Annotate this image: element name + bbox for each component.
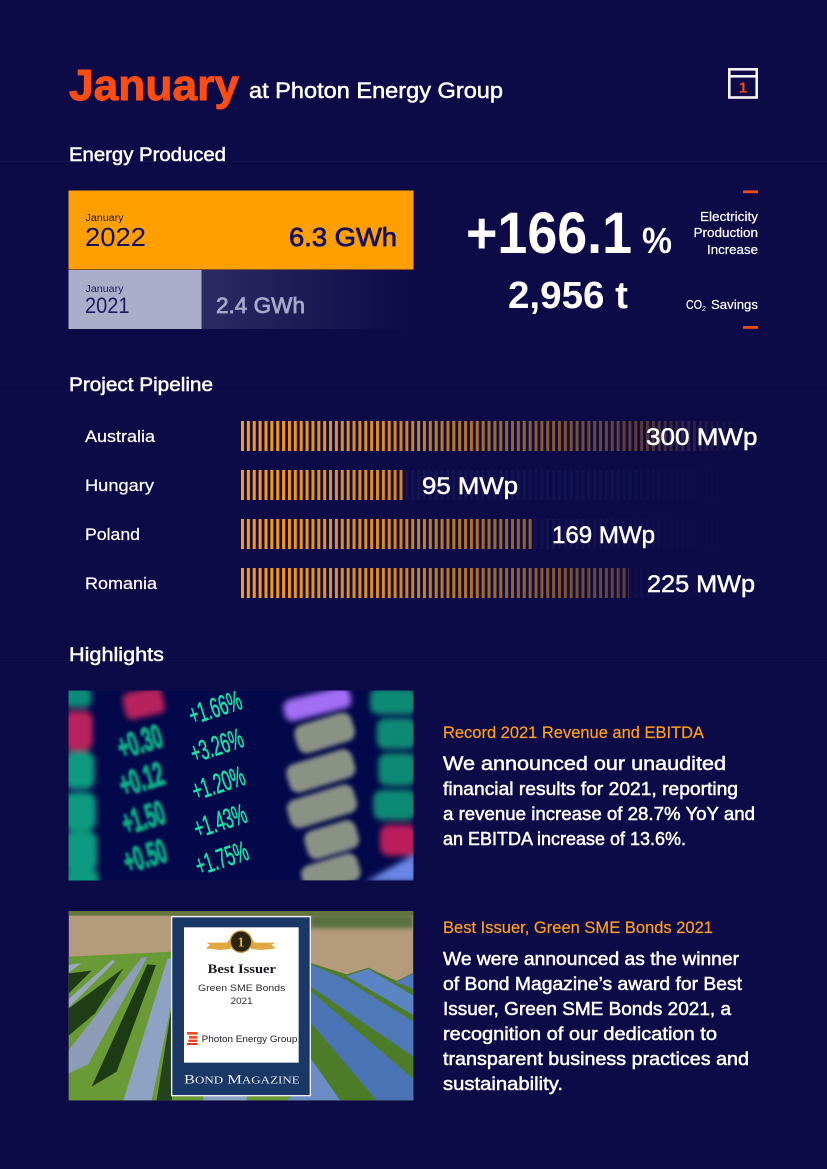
highlight text: revenue: financial results for 2021, reporting: [443, 778, 738, 799]
chart: project pipeline bars: [85, 421, 758, 598]
stat: CO2 savings: [508, 275, 758, 329]
bar: January 2021: [68, 270, 414, 329]
highlight text: revenue: Record 2021 Revenue and EBITDA: [443, 724, 704, 742]
bar: January 2022: 6.3 GWh: [289, 222, 397, 252]
stat: production increase: +166.1: [466, 201, 632, 266]
bar: January 2021: January: [86, 284, 124, 295]
photo: stock market board: +0.50: [119, 833, 171, 881]
photo: stock market board: +1.43%: [190, 798, 251, 844]
highlight text: best issuer: Issuer, Green SME Bonds 2021, a: [443, 998, 732, 1019]
highlight text: best issuer: We were announced as the winner: [443, 948, 739, 969]
row: Hungary: [85, 470, 518, 500]
photo: stock market board: +1.50: [118, 795, 170, 843]
photo: stock market board: +1.75%: [191, 835, 252, 881]
stat: CO2 savings: 2: [702, 306, 706, 313]
bar: January 2021: 2021: [85, 293, 130, 318]
award badge: [172, 917, 310, 1096]
photo: stock market board: +1.66%: [185, 685, 246, 731]
stat: CO2 savings: 2,956 t: [508, 275, 628, 317]
photo: stock market board: [63, 685, 417, 896]
title: [69, 61, 503, 110]
highlight text: best issuer: Best Issuer, Green SME Bonds 2021: [443, 919, 713, 937]
bar: January 2022: [68, 190, 414, 270]
row: Poland: 169 MWp: [552, 522, 655, 549]
stat: production increase: %: [642, 220, 672, 261]
heading: energy produced: Energy Produced: [69, 145, 226, 166]
photo: solar field with award badge: [69, 911, 413, 1100]
row: Hungary: Hungary: [85, 476, 155, 495]
award badge: Green SME Bonds: [198, 983, 286, 993]
highlight text: best issuer: [443, 919, 749, 1094]
stat: CO2 savings: Savings: [711, 298, 758, 312]
icon: calendar: [729, 69, 757, 98]
photo: stock market board: +0.30: [113, 718, 167, 767]
row: Australia: Australia: [85, 427, 156, 446]
photo: stock market board: +3.26%: [186, 723, 247, 769]
award badge: BOND MAGAZINE: [184, 1072, 300, 1086]
highlight text: best issuer: of Bond Magazine’s award for Best: [443, 973, 742, 994]
bar: January 2022: 2022: [85, 222, 146, 252]
award badge: Photon Energy Group: [202, 1034, 297, 1044]
row: Poland: [85, 519, 655, 549]
highlight text: best issuer: sustainability.: [443, 1073, 563, 1094]
highlight text: best issuer: recognition of our dedication to: [443, 1023, 717, 1044]
highlight text: best issuer: transparent business practices and: [443, 1048, 749, 1069]
title: January: [69, 61, 240, 110]
photo: stock market board: +0.12: [115, 756, 169, 804]
row: Australia: 300 MWp: [646, 424, 758, 451]
highlight text: revenue: We announced our unaudited: [443, 753, 726, 775]
bar: January 2021: 2.4 GWh: [216, 293, 305, 318]
stat: production increase: [466, 190, 759, 266]
highlight text: revenue: a revenue increase of 28.7% YoY and: [443, 803, 755, 824]
medal: [206, 931, 276, 952]
row: Romania: 225 MWp: [647, 571, 755, 598]
medal: 1: [238, 934, 244, 949]
award badge: Best Issuer: [208, 962, 276, 976]
highlight text: revenue: an EBITDA increase of 13.6%.: [443, 828, 686, 849]
heading: highlights: Highlights: [69, 645, 164, 666]
heading: project pipeline: Project Pipeline: [69, 375, 213, 396]
row: Romania: [85, 568, 755, 598]
row: Hungary: 95 MWp: [422, 473, 518, 500]
row: Poland: Poland: [85, 525, 140, 544]
highlight text: revenue: [443, 724, 755, 849]
row: Romania: Romania: [85, 574, 158, 593]
award badge: 2021: [231, 996, 253, 1006]
stat: production increase: Electricity: [700, 210, 759, 224]
stat: CO2 savings: CO: [686, 298, 702, 312]
stat: production increase: Production: [694, 226, 758, 240]
photo: stock market board: +1.20%: [188, 760, 249, 806]
icon: calendar: 1: [739, 80, 747, 96]
row: Australia: [85, 421, 758, 451]
logo: [187, 1032, 198, 1045]
panel: production comparison bars: [68, 190, 414, 329]
bar: January 2022: January: [86, 213, 124, 224]
stat: production increase: Increase: [707, 243, 758, 257]
title: at Photon Energy Group: [249, 78, 503, 103]
